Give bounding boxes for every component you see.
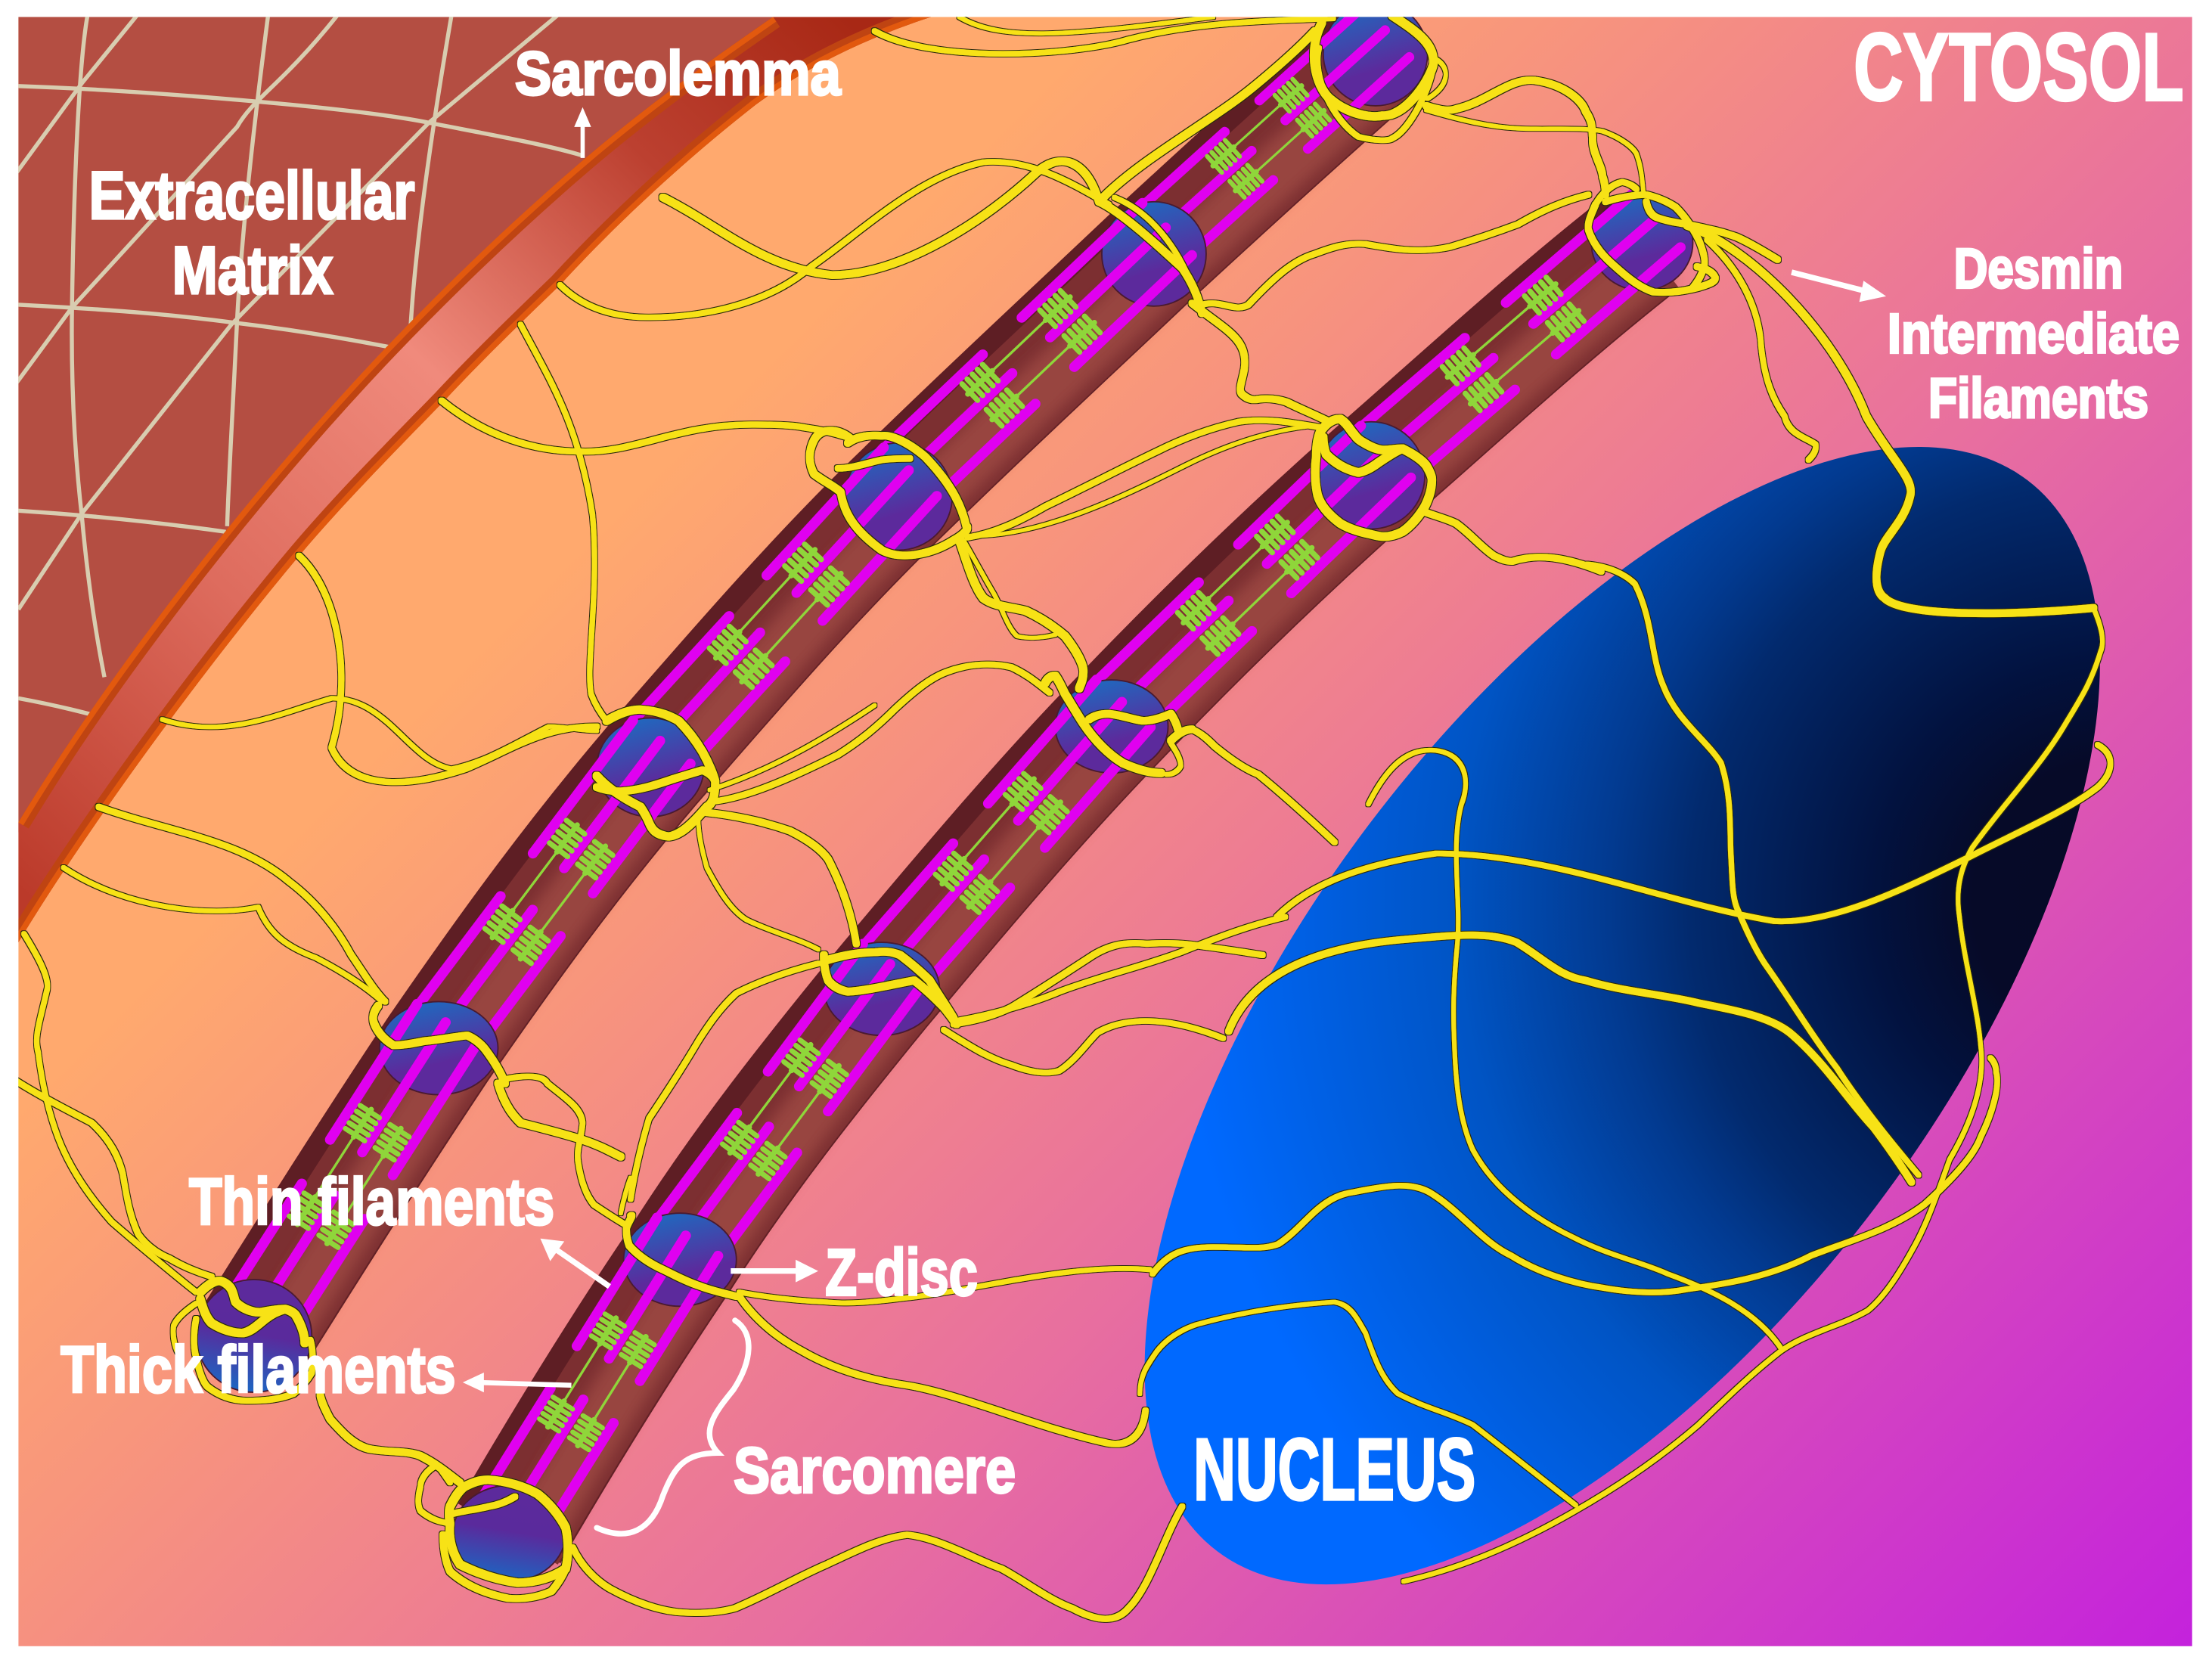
- wrap: Z-disc 3 of tube 2: [1045, 676, 1161, 773]
- Z-disc: [380, 1001, 498, 1095]
- label: Desmin Intermediate Filaments: [1792, 237, 2179, 430]
- myofibril tube 1: [254, 54, 1391, 1351]
- panel: extracellular matrix: [17, 16, 790, 833]
- arrow: thin filaments: [540, 1239, 610, 1286]
- label: Thin filaments: [189, 1165, 610, 1286]
- label: Sarcomere with brace: Sarcomere: [734, 1435, 1016, 1507]
- end disc: [196, 1280, 312, 1392]
- arrow: sarcolemma: [574, 107, 591, 158]
- Z-disc: [1102, 202, 1206, 306]
- sarcolemma membrane: [18, 17, 931, 942]
- wrap: Z-disc 3 of tube 1: [810, 430, 967, 555]
- Z-disc: [1591, 194, 1692, 290]
- arrow: thick filaments: [463, 1373, 572, 1392]
- wrap: Z-disc 1 of tube 1: [373, 1006, 505, 1084]
- label: Extracellular Matrix: [89, 157, 414, 308]
- Z-disc: [1317, 422, 1425, 529]
- sarcomere: [474, 1218, 718, 1549]
- brace: sarcomere: [597, 1320, 749, 1534]
- nucleus and right-side filaments: [1687, 225, 2093, 613]
- label: Desmin Intermediate Filaments: Desmin: [1954, 237, 2123, 300]
- sarcomere: [850, 680, 1151, 1008]
- nucleus: [1145, 447, 2100, 1585]
- label: Z-disc: Z-disc: [825, 1235, 978, 1309]
- wrap: Z-disc top of tube 2: [1588, 204, 1715, 293]
- sarcomere: [868, 203, 1192, 516]
- label: Sarcolemma: Sarcolemma: [515, 39, 842, 108]
- sarcomere: [1082, 426, 1411, 746]
- label: Desmin Intermediate Filaments: Filaments: [1928, 366, 2148, 430]
- wrap: Z-disc 4 of tube 1: [1099, 202, 1202, 313]
- sarcomere: [1344, 193, 1680, 497]
- Z-disc: [1055, 680, 1168, 773]
- sarcomere: [405, 721, 690, 1066]
- top and upper filaments: [875, 18, 1333, 54]
- Z-disc: [624, 1213, 737, 1306]
- label: Sarcomere with brace: [597, 1320, 1016, 1534]
- arrow: Z-disc: [731, 1260, 818, 1283]
- wrap: Z-disc 1 of tube 2: [626, 1215, 737, 1296]
- Z-disc: [1323, 2, 1428, 106]
- label: NUCLEUS: NUCLEUS: [1193, 1420, 1475, 1519]
- sarcomere: [219, 1004, 478, 1351]
- wrap: Z-disc 2 of tube 1: [597, 709, 715, 836]
- wrap: end disc of tube 2: [449, 1480, 568, 1583]
- myofibril tube 2: [509, 243, 1658, 1549]
- Z-disc: [824, 942, 939, 1035]
- wrap: end disc of tube 1: [200, 1281, 305, 1343]
- sarcomeres and Z-discs: tube 1: [196, 2, 1428, 1392]
- Z-disc: [845, 443, 952, 550]
- label: Extracellular Matrix: Extracellular: [89, 157, 414, 233]
- wrap: Z-disc top of tube 1: [1314, 16, 1434, 116]
- sarcomere: [618, 448, 937, 786]
- sarcomere: [1125, 6, 1410, 272]
- label: Extracellular Matrix: Matrix: [172, 232, 333, 308]
- label: Z-disc: [731, 1235, 978, 1309]
- wrap: Z-disc 4 of tube 2: [1315, 419, 1432, 537]
- label: Thick filaments: Thick filaments: [60, 1332, 456, 1407]
- wrap: Z-disc 2 of tube 2: [825, 951, 954, 1019]
- arrow: desmin: [1792, 272, 1886, 302]
- label: Thin filaments: Thin filaments: [189, 1165, 554, 1239]
- Z-disc: [597, 718, 704, 817]
- sarcomere: [647, 944, 921, 1277]
- label: Sarcolemma: [515, 39, 842, 158]
- end disc: [453, 1485, 566, 1581]
- sarcomeres and Z-discs: tube 2: [453, 193, 1692, 1581]
